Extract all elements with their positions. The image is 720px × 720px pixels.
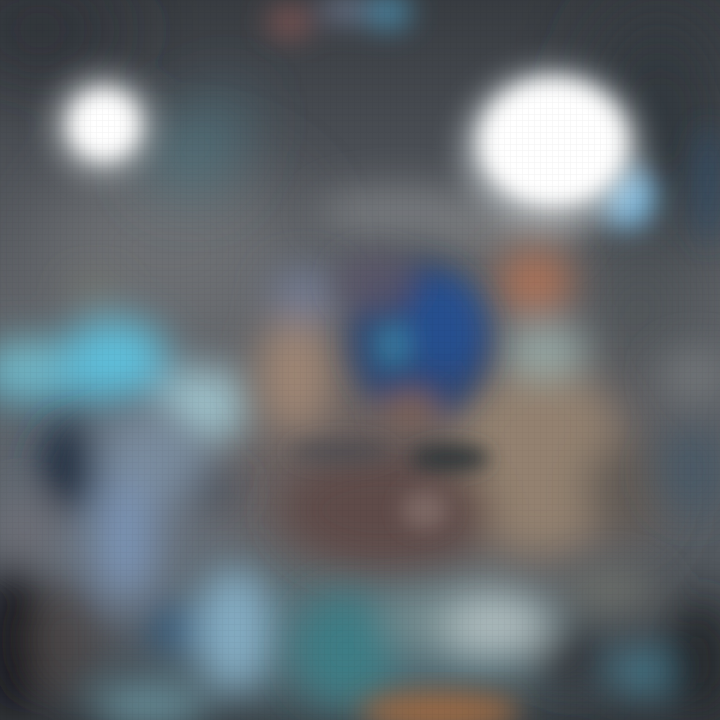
right blue haze — [600, 125, 720, 245]
top colored lights — [266, 0, 412, 40]
right side haze — [654, 349, 720, 516]
cyan cloud left — [0, 283, 251, 445]
figure: dark glasses band — [290, 440, 490, 530]
pale haze streak below right light — [315, 188, 580, 255]
left glowing light — [49, 71, 157, 179]
bottom teal garment — [295, 570, 720, 720]
lower left dark and blue forms — [0, 415, 273, 720]
right glowing light — [460, 66, 644, 234]
teal haze near left light — [145, 84, 251, 197]
bottom orange accent — [360, 692, 520, 720]
figure: body — [257, 248, 665, 570]
figure: head with blue hair — [335, 252, 490, 430]
